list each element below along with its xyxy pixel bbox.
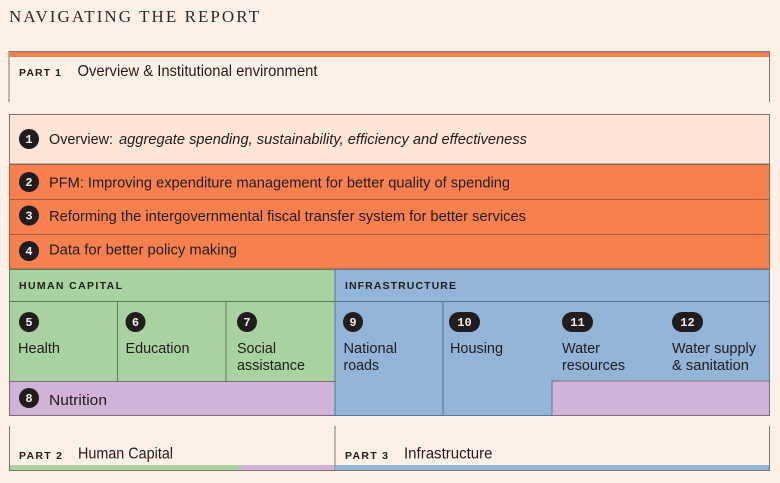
panel: part 1 header: PART 1 bbox=[19, 67, 61, 79]
chapter 12 water supply and sanitation bbox=[672, 312, 756, 374]
panel: chapter 1 overview: 1 bbox=[25, 133, 33, 147]
panel: infrastructure bbox=[335, 270, 770, 416]
panel: chapter 1 overview bbox=[10, 114, 770, 164]
panel: chapter 2 PFM: PFM: Improving expenditure management for better quality of spending bbox=[49, 174, 510, 192]
panel: chapter 3 fiscal transfers: 3 bbox=[25, 210, 33, 224]
chapter 5 health: 5 bbox=[25, 316, 33, 330]
chapter 6 education: 6 bbox=[132, 316, 139, 330]
panel: chapter 4 data bbox=[10, 234, 770, 269]
chapter 12 water supply and sanitation: & sanitation bbox=[672, 357, 749, 374]
chapter 10 housing bbox=[449, 312, 503, 357]
panel: chapter 1 overview: aggregate spending, sustainability, efficiency and effectiveness bbox=[119, 131, 527, 148]
chapter 9 national roads bbox=[343, 312, 397, 374]
panel: chapter 4 data: 4 bbox=[25, 245, 33, 259]
chapter 5 health bbox=[18, 312, 60, 357]
chapter 12 water supply and sanitation: Water supply bbox=[672, 340, 756, 357]
heading: human capital: HUMAN CAPITAL bbox=[19, 280, 123, 292]
chapter 10 housing: Housing bbox=[450, 340, 503, 357]
chapter 8 nutrition: Nutrition bbox=[49, 392, 107, 409]
chapter 10 housing: 10 bbox=[457, 316, 472, 330]
chapter 9 national roads: 9 bbox=[349, 316, 357, 330]
panel: chapter 4 data: Data for better policy making bbox=[49, 242, 237, 258]
panel: chapter 3 fiscal transfers: Reforming the intergovernmental fiscal transfer system for better services bbox=[49, 208, 526, 225]
title: NAVIGATING THE REPORT bbox=[9, 7, 260, 26]
chapter 6 education bbox=[126, 312, 190, 357]
chapter 9 national roads: roads bbox=[344, 357, 379, 374]
chapter 6 education: Education bbox=[126, 340, 190, 357]
heading: infrastructure: INFRASTRUCTURE bbox=[345, 280, 456, 292]
panel: chapter 2 PFM: 2 bbox=[25, 176, 33, 190]
chapter 8 nutrition bbox=[10, 382, 335, 416]
chapter 5 health: Health bbox=[18, 340, 60, 357]
panel: human capital bbox=[9, 270, 335, 416]
chapter 11 water resources: resources bbox=[562, 357, 625, 374]
panel: part 3 footer: Infrastructure bbox=[404, 446, 492, 462]
panel: part 3 footer bbox=[335, 426, 770, 470]
chapter 7 social assistance bbox=[237, 312, 305, 374]
chapter 8 nutrition: 8 bbox=[25, 392, 33, 406]
panel: chapter 1 overview: Overview: bbox=[49, 131, 113, 148]
purple block: nutrition link bbox=[552, 381, 770, 416]
panel: part 3 footer: PART 3 bbox=[345, 450, 388, 462]
panel: part 2 footer bbox=[9, 426, 335, 470]
chapter 11 water resources: 11 bbox=[570, 316, 585, 330]
chapter 7 social assistance: 7 bbox=[243, 316, 251, 330]
panel: chapter 3 fiscal transfers bbox=[10, 200, 770, 234]
chapter 7 social assistance: Social bbox=[237, 340, 276, 357]
panel: part 2 footer: Human Capital bbox=[78, 446, 173, 462]
chapter 12 water supply and sanitation: 12 bbox=[680, 316, 695, 330]
chapter 7 social assistance: assistance bbox=[237, 357, 305, 374]
chapter 11 water resources: Water bbox=[562, 340, 600, 357]
panel: part 1 header bbox=[9, 52, 770, 102]
chapter 11 water resources bbox=[562, 312, 625, 374]
chapter 9 national roads: National bbox=[344, 340, 397, 357]
panel: part 1 header: Overview & Institutional environment bbox=[78, 63, 318, 80]
panel: part 2 footer: PART 2 bbox=[19, 450, 62, 462]
panel: chapter 2 PFM bbox=[10, 164, 770, 200]
